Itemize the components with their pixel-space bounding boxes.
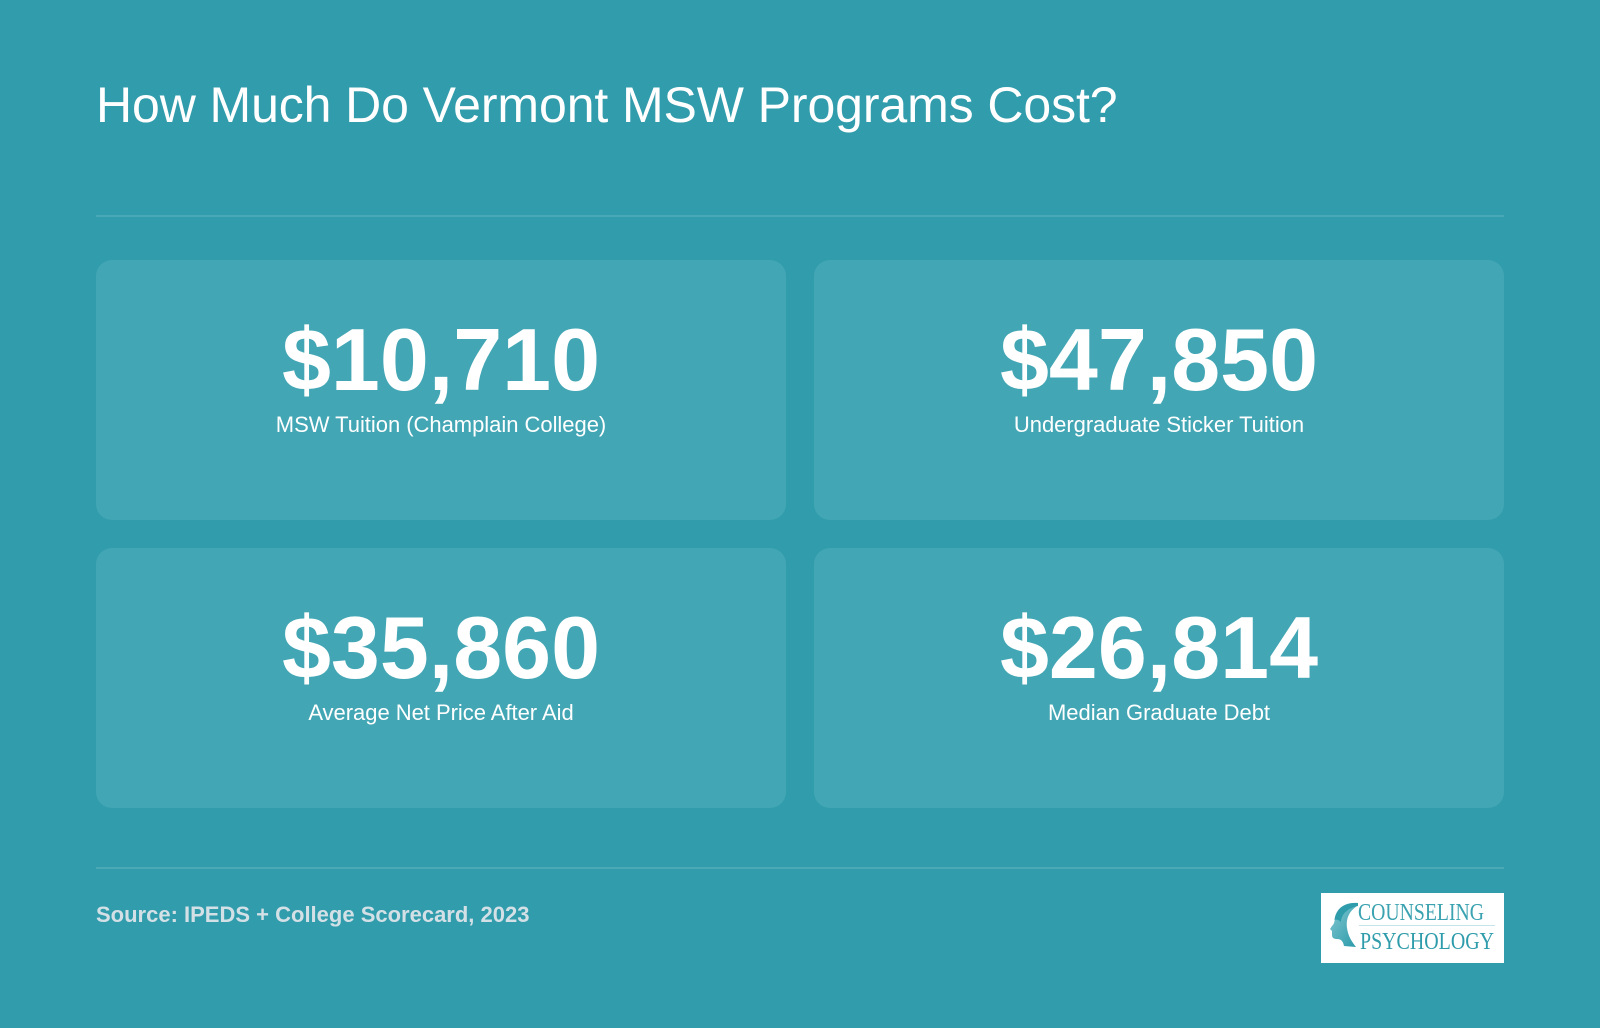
title: How Much Do Vermont MSW Programs Cost? [96,77,1118,133]
label: MSW tuition: MSW Tuition (Champlain College) [276,412,606,436]
label: graduate debt: Median Graduate Debt [1048,700,1270,724]
panel: median graduate debt [814,548,1504,808]
panel: average net price [96,548,786,808]
label: undergraduate tuition: Undergraduate Sticker Tuition [1014,412,1304,436]
value: graduate debt: $26,814 [1000,598,1318,697]
value: undergraduate tuition: $47,850 [1000,310,1318,409]
value: MSW tuition: $10,710 [282,310,600,409]
logo: Counseling Psychology [1321,893,1504,963]
value: net price: $35,860 [282,598,600,697]
panel: MSW tuition [96,260,786,520]
icon: head profile [1330,903,1358,947]
label: net price: Average Net Price After Aid [308,700,574,724]
source note: Source: IPEDS + College Scorecard, 2023 [96,902,529,927]
panel: undergraduate sticker tuition [814,260,1504,520]
